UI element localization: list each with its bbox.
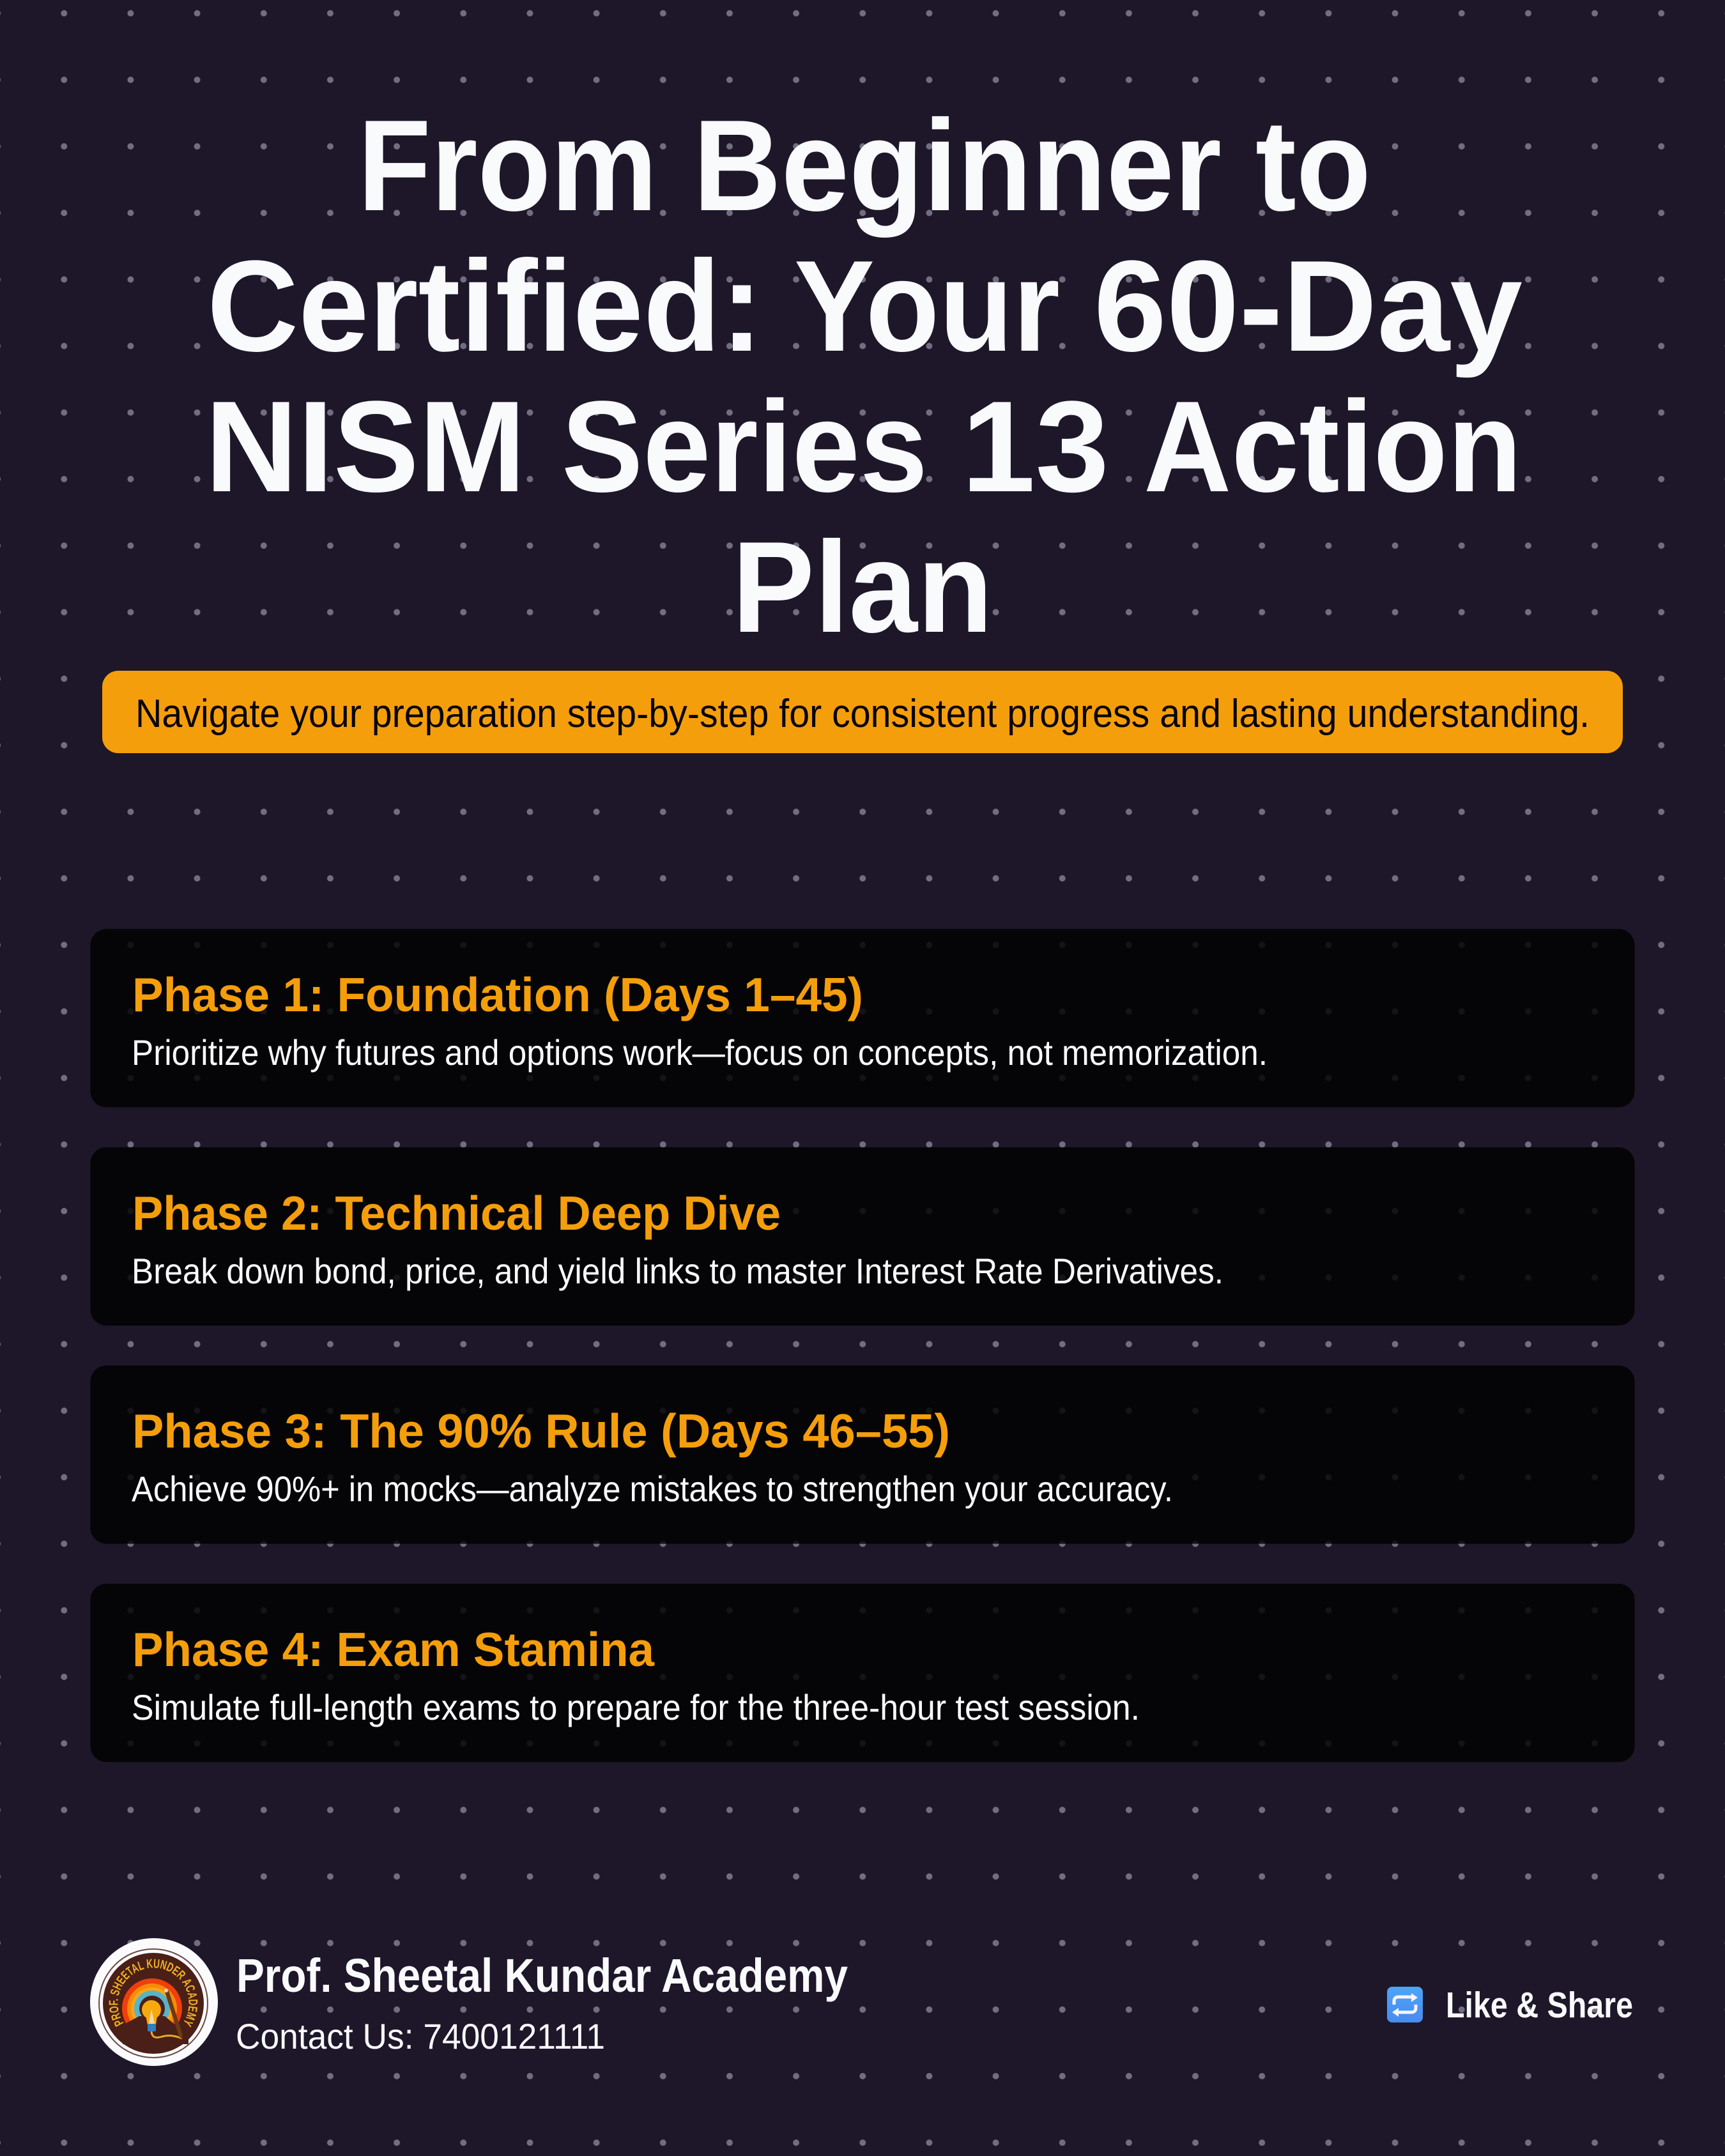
title: Certified:	[207, 234, 763, 379]
subtitle banner: Navigate your preparation step-by-step for consistent progress and lasting understanding.	[135, 692, 1590, 736]
icon: share	[1387, 1987, 1423, 2022]
title: Action	[1144, 374, 1522, 519]
title: Series	[562, 374, 928, 519]
phase 4 description: Simulate full-length exams to prepare for the three-hour test session.	[132, 1687, 1140, 1727]
title: 60-Day	[1094, 234, 1522, 379]
phase 2 description: Break down bond, price, and yield links to master Interest Rate Derivatives.	[132, 1251, 1223, 1291]
panel: phase 1	[91, 929, 1634, 1107]
phase 1 heading: Phase 1: Foundation (Days 1–45)	[132, 968, 863, 1021]
panel: phase 3	[91, 1366, 1634, 1544]
academy name: Prof. Sheetal Kundar Academy	[236, 1949, 848, 2002]
icon: academy logo: PROF. SHEETAL KUNDER ACADEMY	[109, 1959, 198, 2028]
subtitle banner	[102, 671, 1623, 753]
phase 3 heading: Phase 3: The 90% Rule (Days 46–55)	[132, 1404, 950, 1458]
panel: phase 2	[91, 1147, 1634, 1326]
icon: academy logo	[90, 1938, 218, 2066]
title: 13	[962, 374, 1109, 519]
phase 3 description: Achieve 90%+ in mocks—analyze mistakes to strengthen your accuracy.	[132, 1469, 1173, 1509]
title: Your	[794, 234, 1060, 379]
title	[205, 93, 1522, 660]
phase 4 heading: Phase 4: Exam Stamina	[132, 1623, 655, 1676]
panel: phase 4	[91, 1584, 1634, 1762]
title: Beginner	[693, 93, 1222, 238]
title: to	[1255, 93, 1371, 238]
phase 1 description: Prioritize why futures and options work—focus on concepts, not memorization.	[132, 1032, 1268, 1073]
like and share label: Like & Share	[1446, 1985, 1633, 2026]
title: From	[358, 93, 657, 238]
phase 2 heading: Phase 2: Technical Deep Dive	[132, 1186, 781, 1240]
title: NISM	[205, 374, 526, 519]
title: Plan	[732, 515, 993, 660]
contact number: Contact Us: 7400121111	[236, 2016, 605, 2056]
